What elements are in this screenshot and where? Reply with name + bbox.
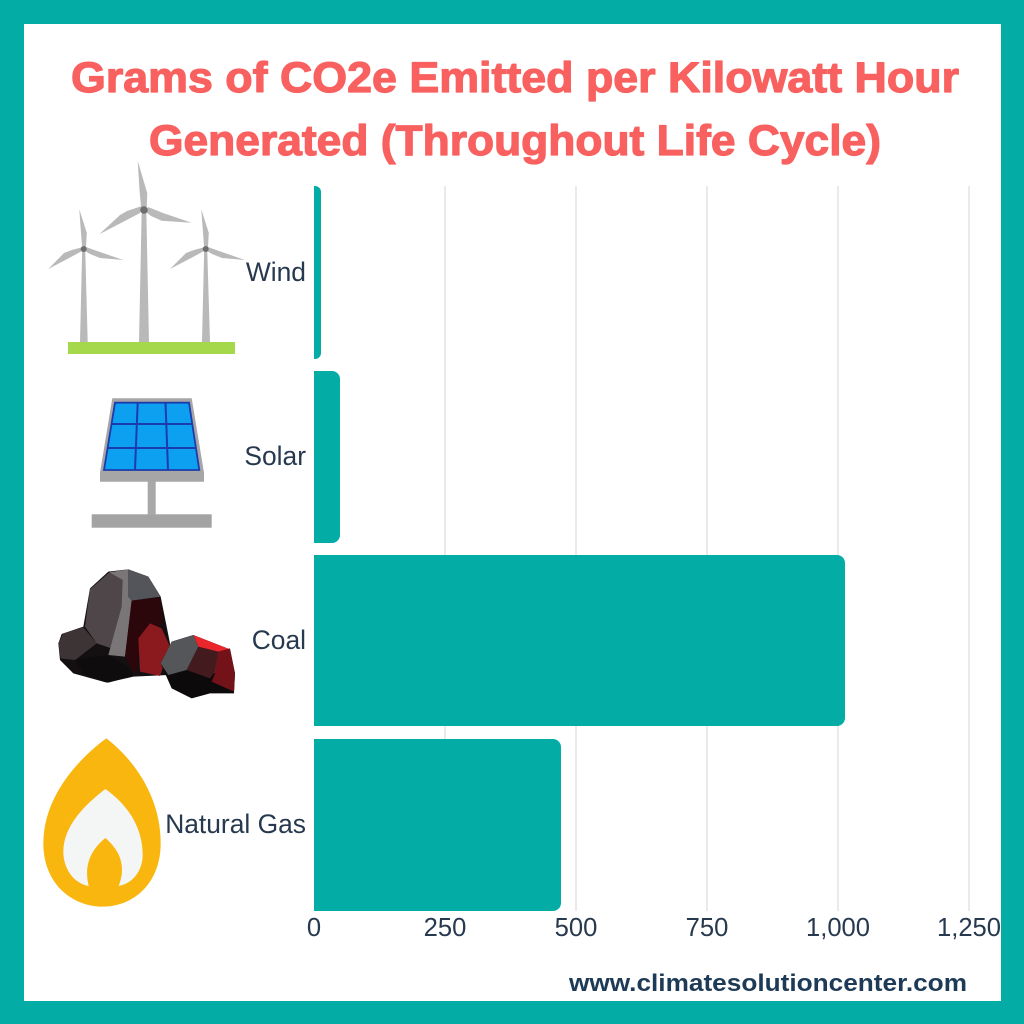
bar chart — [165, 186, 1001, 942]
axis labels: 1,250 — [937, 914, 1001, 942]
title: Generated (Throughout Life Cycle) — [149, 117, 881, 165]
icon: natural gas flame — [43, 738, 161, 907]
axis labels: 1,000 — [806, 914, 870, 942]
bar: solar — [314, 371, 340, 543]
axis labels: 750 — [686, 914, 728, 942]
bar: natural gas — [314, 739, 561, 911]
icon: coal — [58, 569, 235, 698]
icon: solar panel — [92, 398, 212, 528]
bar: wind — [314, 186, 321, 359]
footer url: www.climatesolutioncenter.com — [568, 970, 967, 997]
axis labels: 0 — [307, 914, 321, 942]
bar: coal — [314, 555, 845, 726]
category labels: Natural Gas — [165, 809, 306, 839]
axis labels — [307, 914, 1001, 942]
axis labels: 250 — [424, 914, 466, 942]
title — [71, 54, 959, 165]
axis labels: 500 — [555, 914, 597, 942]
category labels: Wind — [246, 257, 306, 287]
icon: wind turbines — [48, 161, 245, 354]
category labels: Coal — [252, 625, 306, 655]
title: Grams of CO2e Emitted per Kilowatt Hour — [71, 54, 959, 102]
category labels: Solar — [244, 441, 306, 471]
category labels — [165, 257, 306, 839]
